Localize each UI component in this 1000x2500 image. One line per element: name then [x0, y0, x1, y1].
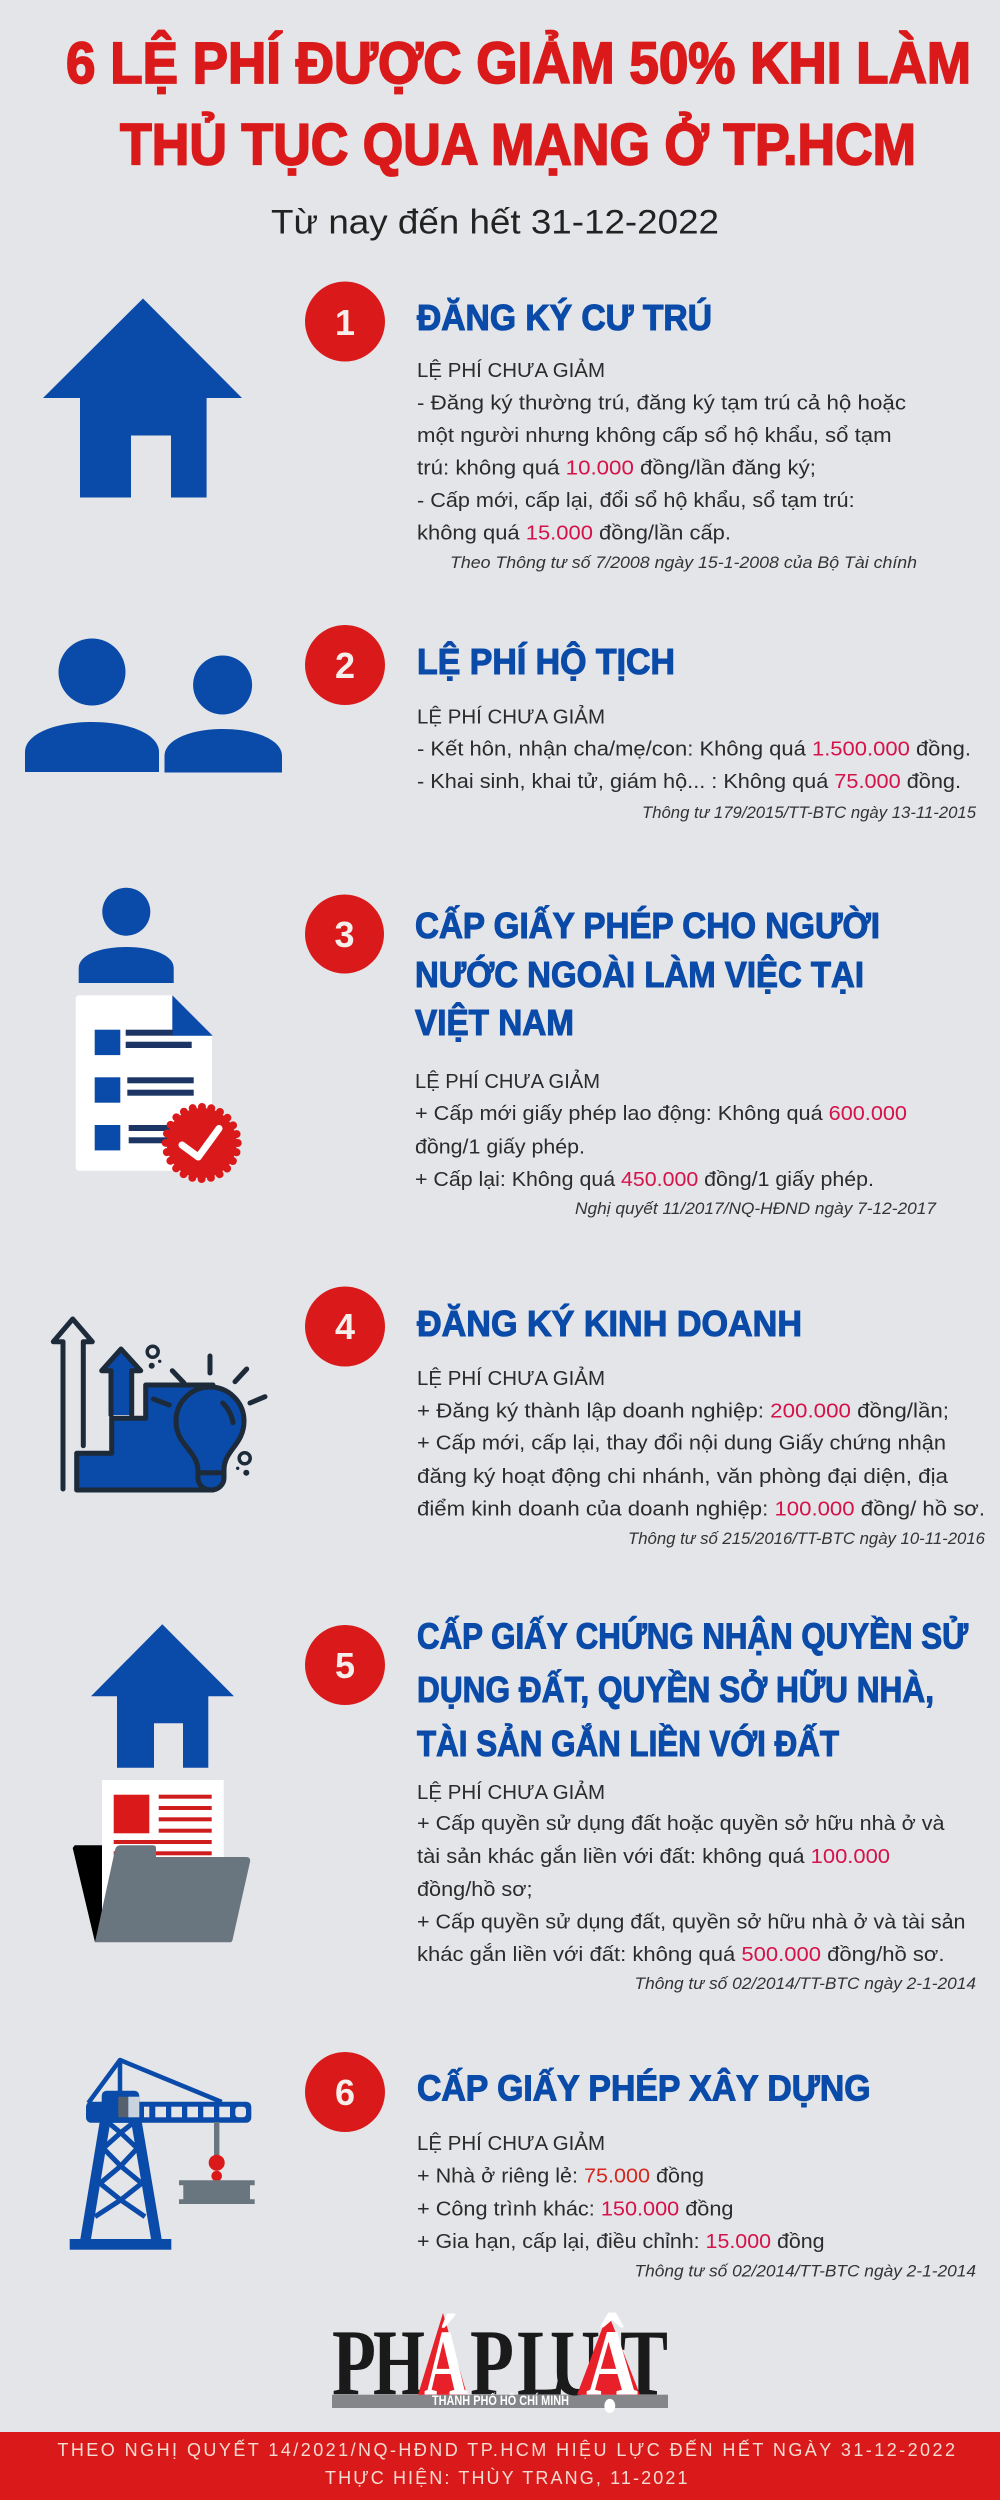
heading 3: CẤP GIẤY PHÉP CHO NGƯỜI — [415, 904, 880, 946]
panel: 6 construction permit — [70, 2052, 976, 2281]
text block 5: LỆ PHÍ CHƯA GIẢM — [417, 1781, 605, 1804]
logo: Pháp Luật: H — [373, 2312, 425, 2416]
text block 5: + Cấp quyền sử dụng đất hoặc quyền sở hữu nhà ở và — [417, 1813, 945, 1835]
text block 4: điểm kinh doanh của doanh nghiệp: 100.000 đồng/ hồ sơ. — [417, 1498, 985, 1520]
logo: Pháp Luật: THÀNH PHỐ HỒ CHÍ MINH — [432, 2391, 569, 2408]
number badge 4: 4 — [335, 1306, 355, 1347]
heading 5: DỤNG ĐẤT, QUYỀN SỞ HỮU NHÀ, — [417, 1668, 934, 1710]
logo: Pháp Luật: U — [550, 2312, 600, 2416]
source 3: Nghị quyết 11/2017/NQ-HĐND ngày 7-12-2017 — [575, 1200, 937, 1218]
text block 1: không quá 15.000 đồng/lần cấp. — [417, 522, 731, 544]
text block 3: + Cấp lại: Không quá 450.000 đồng/1 giấy phép. — [415, 1169, 874, 1191]
logo: Pháp Luật: Ậ — [586, 2312, 638, 2416]
text block 6: LỆ PHÍ CHƯA GIẢM — [417, 2132, 605, 2155]
number badge 3: 3 — [334, 914, 355, 955]
text block 1: một người nhưng không cấp sổ hộ khẩu, sổ tạm — [417, 425, 892, 447]
heading 2: LỆ PHÍ HỘ TỊCH — [417, 640, 675, 682]
heading 5 — [417, 1615, 968, 1764]
heading 5: TÀI SẢN GẮN LIỀN VỚI ĐẤT — [417, 1722, 839, 1764]
icon: house and folder — [73, 1624, 250, 1942]
source 5: Thông tư số 02/2014/TT-BTC ngày 2-1-2014 — [634, 1975, 976, 1993]
text block 5: khác gắn liền với đất: không quá 500.000 đồng/hồ sơ. — [417, 1943, 944, 1966]
text block 4: + Cấp mới, cấp lại, thay đổi nội dung Giấy chứng nhận — [417, 1432, 946, 1454]
panel: 1 residence registration — [43, 282, 917, 572]
footer band: THEO NGHỊ QUYẾT 14/2021/NQ-HĐND TP.HCM HIỆU LỰC ĐẾN HẾT NGÀY 31-12-2022 — [57, 2439, 955, 2460]
title: THỦ TỤC QUA MẠNG Ở TP.HCM — [120, 112, 916, 178]
text block 3 — [415, 1070, 907, 1191]
icon: stairs, arrows and light bulb — [53, 1319, 265, 1490]
text block 1: - Đăng ký thường trú, đăng ký tạm trú cả hộ hoặc — [417, 392, 906, 414]
footer band — [0, 2432, 1000, 2500]
number badge 5: 5 — [335, 1645, 355, 1686]
text block 5: tài sản khác gắn liền với đất: không quá 100.000 — [417, 1845, 890, 1868]
source 1: Theo Thông tư số 7/2008 ngày 15-1-2008 của Bộ Tài chính — [450, 554, 917, 572]
source 2: Thông tư 179/2015/TT-BTC ngày 13-11-2015 — [642, 804, 977, 822]
text block 4: LỆ PHÍ CHƯA GIẢM — [417, 1367, 605, 1390]
text block 5: + Cấp quyền sử dụng đất, quyền sở hữu nhà ở và tài sản — [417, 1912, 966, 1934]
text block 2: - Khai sinh, khai tử, giám hộ... : Không quá 75.000 đồng. — [417, 771, 961, 793]
logo: Pháp Luật: T — [620, 2312, 668, 2416]
footer band: THỰC HIỆN: THÙY TRANG, 11-2021 — [325, 2467, 688, 2488]
text block 1 — [417, 359, 906, 544]
logo: Pháp Luật: Á — [424, 2312, 468, 2416]
text block 5 — [417, 1781, 966, 1966]
source 6: Thông tư số 02/2014/TT-BTC ngày 2-1-2014 — [634, 2263, 976, 2281]
text block 6 — [417, 2132, 825, 2253]
heading 3: NƯỚC NGOÀI LÀM VIỆC TẠI — [415, 953, 864, 995]
text block 4: + Đăng ký thành lập doanh nghiệp: 200.000 đồng/lần; — [417, 1400, 949, 1422]
number badge 2: 2 — [335, 645, 355, 686]
panel: 5 land use certificate — [73, 1615, 976, 1993]
logo: Pháp Luật: P — [470, 2312, 514, 2416]
text block 2: - Kết hôn, nhận cha/mẹ/con: Không quá 1.500.000 đồng. — [417, 738, 971, 760]
text block 3: đồng/1 giấy phép. — [415, 1136, 585, 1158]
subtitle: Từ nay đến hết 31-12-2022 — [271, 204, 719, 242]
heading 4: ĐĂNG KÝ KINH DOANH — [417, 1303, 802, 1344]
text block 5: đồng/hồ sơ; — [417, 1879, 532, 1901]
number badge 2 — [305, 625, 385, 705]
text block 1: trú: không quá 10.000 đồng/lần đăng ký; — [417, 458, 816, 480]
number badge 3 — [305, 894, 384, 974]
icon: person with approved document — [76, 888, 238, 1179]
text block 3: LỆ PHÍ CHƯA GIẢM — [415, 1070, 600, 1093]
number badge 4 — [305, 1286, 385, 1366]
panel: 4 business registration — [53, 1286, 986, 1548]
logo: Pháp Luật — [332, 2312, 668, 2416]
text block 3: + Cấp mới giấy phép lao động: Không quá 600.000 — [415, 1103, 907, 1125]
heading 3 — [415, 904, 880, 1043]
icon: two people — [25, 638, 282, 772]
panel: 2 civil status fee — [25, 625, 977, 822]
number badge 5 — [305, 1625, 385, 1705]
text block 4: đăng ký hoạt động chi nhánh, văn phòng đại diện, địa — [417, 1466, 949, 1488]
text block 6: + Công trình khác: 150.000 đồng — [417, 2199, 734, 2221]
source 4: Thông tư số 215/2016/TT-BTC ngày 10-11-2016 — [628, 1530, 986, 1548]
text block 6: + Nhà ở riêng lẻ: 75.000 đồng — [417, 2166, 704, 2188]
icon: tower crane — [70, 2060, 255, 2250]
heading 1: ĐĂNG KÝ CƯ TRÚ — [417, 296, 712, 338]
text block 1: - Cấp mới, cấp lại, đổi sổ hộ khẩu, sổ tạm trú: — [417, 490, 855, 512]
heading 3: VIỆT NAM — [415, 1001, 574, 1043]
panel: 3 foreign worker permit — [76, 888, 937, 1218]
text block 4 — [417, 1367, 985, 1520]
number badge 6: 6 — [335, 2072, 355, 2113]
number badge 1 — [305, 282, 385, 362]
number badge 1: 1 — [335, 302, 355, 343]
text block 1: LỆ PHÍ CHƯA GIẢM — [417, 359, 605, 382]
title — [66, 31, 971, 178]
text block 2: LỆ PHÍ CHƯA GIẢM — [417, 706, 605, 728]
text block 2 — [417, 706, 971, 793]
logo: Pháp Luật: P — [332, 2312, 376, 2416]
logo: Pháp Luật: L — [517, 2312, 565, 2416]
number badge 6 — [305, 2052, 385, 2132]
icon: house — [43, 298, 242, 498]
heading 6: CẤP GIẤY PHÉP XÂY DỰNG — [417, 2067, 870, 2109]
text block 6: + Gia hạn, cấp lại, điều chỉnh: 15.000 đồng — [417, 2231, 825, 2253]
